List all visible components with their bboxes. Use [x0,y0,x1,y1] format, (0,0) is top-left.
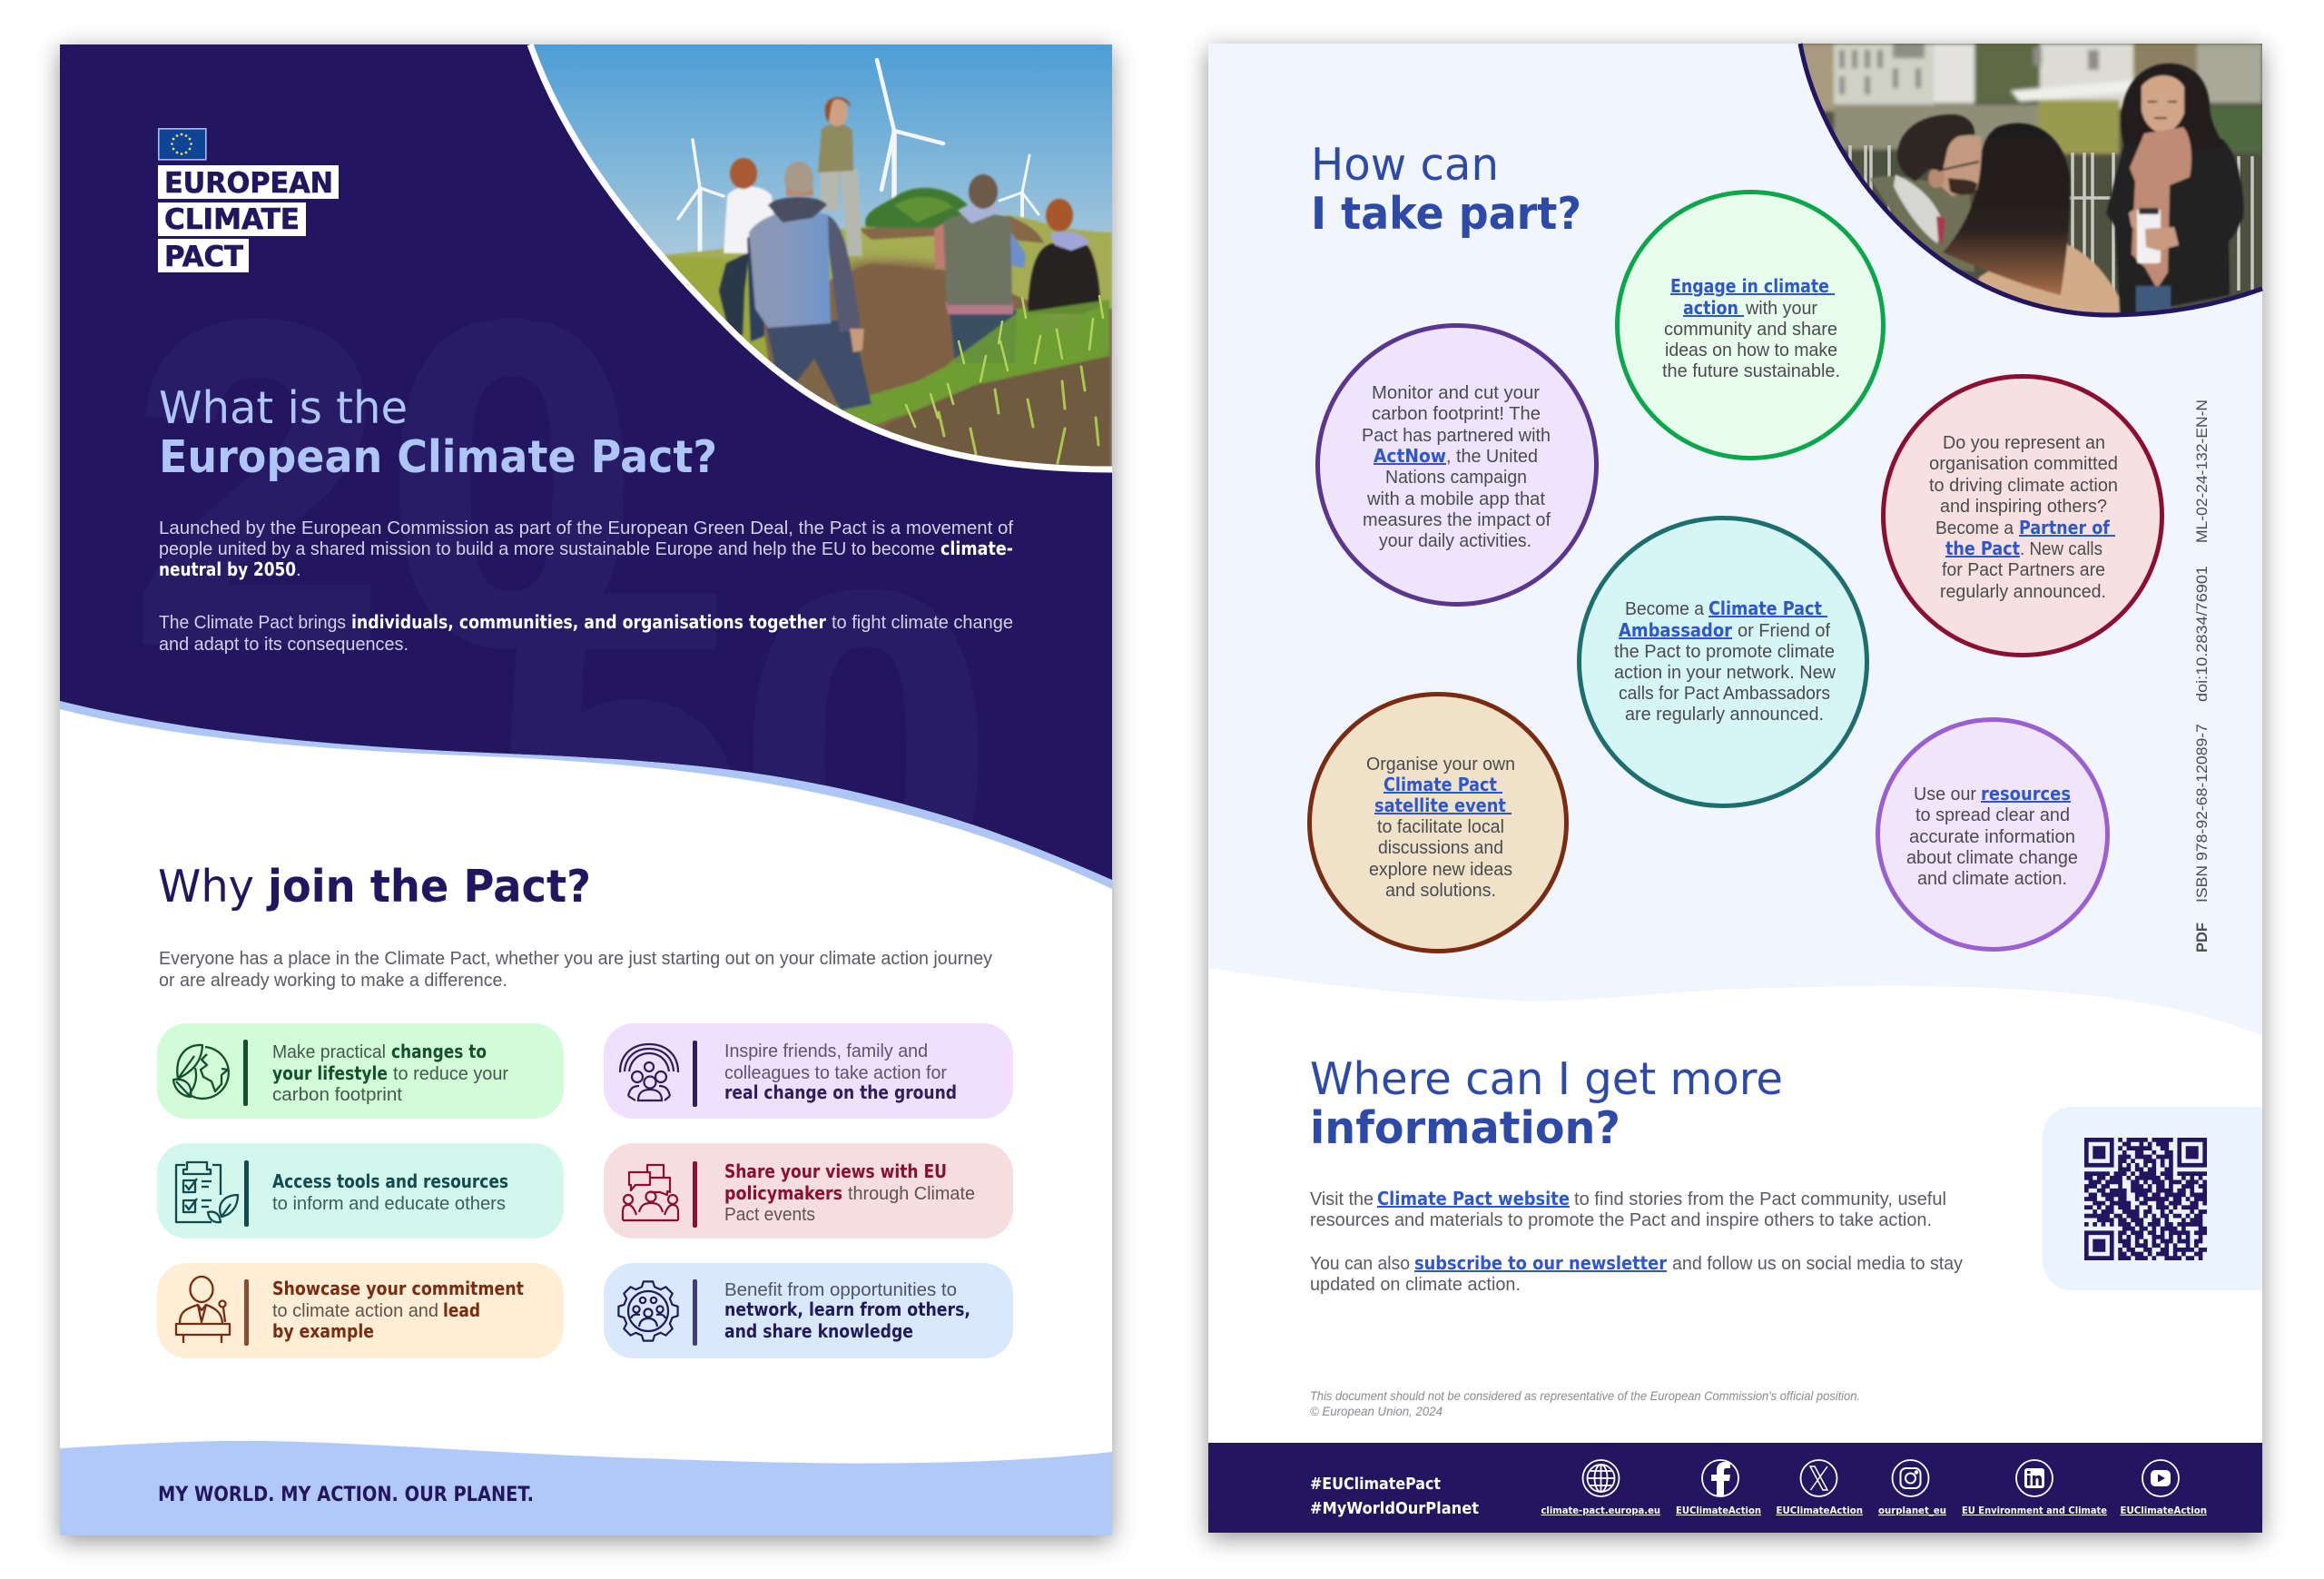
text block: intro: The Climate Pact brings [159,612,346,633]
card text: by example [272,1320,374,1342]
heading: how can I take part: How can [1311,139,1499,191]
curve border of photo [1800,44,2262,315]
pale blue background wave [1208,44,2262,1036]
circle: climate pact ambassador: calls for Pact Ambassadors [1619,683,1830,704]
circle: monitor carbon footprint: Pact has partnered with [1362,425,1551,446]
icon: facebook [1702,1460,1738,1496]
card text: through Climate [848,1183,975,1204]
circle: resources [1877,719,2108,950]
card text: carbon footprint [272,1084,402,1105]
circle: resources: and climate action. [1917,868,2067,889]
icon: checklist with leaf [176,1162,238,1222]
social link labels: EUClimateAction [2121,1505,2207,1516]
heading: why join the pact: Why [158,861,254,913]
card text: to climate action and [272,1300,438,1321]
social link labels: EU Environment and Climate [1962,1505,2107,1516]
circle: partner of the pact: organisation committed [1929,453,2118,474]
woman facing the viewer [2106,136,2243,316]
heading: what is the European Climate Pact [159,382,717,483]
circle: climate pact ambassador [1580,518,1866,806]
logo: European Climate Pact: PACT [164,241,243,273]
text block: visit website and newsletter: resources and materials to promote the Pact and inspire others to take action. [1310,1209,1932,1230]
man in blue vest [766,320,872,410]
divider bar [693,1161,697,1228]
card text: Access tools and resources [272,1170,508,1192]
circle: engage in climate action: action [1683,297,1744,319]
circle: partner of the pact: . New calls [2020,538,2102,559]
heading: how can I take part: I take part? [1311,188,1581,240]
photo: three people talking [1800,44,2262,318]
panel: page 1 what is the pact [60,44,1112,1535]
icon: linkedin [2016,1460,2053,1496]
text block: why join intro [159,948,993,991]
card text: your lifestyle [272,1062,388,1084]
card text: lead [443,1299,480,1321]
social link labels: ourplanet_eu [1878,1505,1946,1516]
circle: monitor carbon footprint: Nations campaign [1385,467,1527,488]
card: network and learn [604,1263,1013,1358]
circle: partner of the pact: Become a [1935,518,2014,538]
dark hero background [60,44,1112,880]
social link labels: EUClimateAction [1676,1505,1761,1516]
text block: why join intro: or are already working to make a difference. [159,970,507,991]
footer band with social links [1208,1443,2262,1533]
circle: satellite event [1309,694,1567,952]
light wave strip [60,701,1112,889]
footer wave with slogan [60,1441,1112,1535]
circle: climate pact ambassador: are regularly announced. [1625,704,1824,725]
heading: why join the pact: join the Pact? [266,861,591,913]
circle: monitor carbon footprint: measures the impact of [1363,509,1551,530]
card text [724,1160,975,1225]
text block: visit website and newsletter: updated on climate action. [1310,1274,1521,1295]
divider bar [243,1040,248,1106]
icon: website globe [1583,1460,1620,1496]
card text: Share your views with EU [724,1160,947,1182]
footer wave with slogan: MY WORLD. MY ACTION. OUR PLANET. [158,1484,534,1506]
circle: partner of the pact: regularly announced. [1940,581,2106,602]
card text: colleagues to take action for [724,1062,947,1083]
soil patch [850,255,946,272]
card: changes to lifestyle [157,1023,564,1119]
person in white [719,252,749,335]
text block: why join intro: Everyone has a place in the Climate Pact, whether you are just starting out on your climate action journey [159,948,993,969]
logo: European Climate Pact: EUROPEAN [164,167,333,200]
circle: climate pact ambassador: Ambassador [1619,619,1732,641]
text block: intro: to fight climate change [832,612,1013,633]
heading: where can I get more information: Where can I get more [1310,1053,1783,1105]
EU flag [159,129,206,160]
QR code [2084,1140,2207,1258]
card: tools and resources [157,1143,564,1239]
card text: Pact events [724,1204,815,1225]
circle: engage in climate action: community and share [1664,319,1837,340]
circle: engage in climate action: with your [1745,298,1817,319]
circle: resources: resources [1981,783,2071,804]
man in green vest [950,311,1017,363]
divider bar [693,1041,697,1107]
circle: monitor carbon footprint: carbon footprint! The [1372,403,1541,424]
circle: monitor carbon footprint [1318,325,1596,605]
card text [272,1170,508,1214]
vertical document identifiers: ML-02-24-132-EN-N [2193,400,2211,543]
text block: intro: . [296,559,301,580]
social link labels: EUClimateAction [1776,1505,1863,1516]
watermark 2050: 0 [740,499,992,1007]
card text: to reduce your [393,1063,508,1084]
social link labels [1541,1505,2207,1516]
icon: instagram [1892,1460,1928,1496]
card: share your views [604,1143,1013,1239]
circle: resources: about climate change [1906,847,2078,868]
circle: monitor carbon footprint: ActNow [1374,445,1446,467]
circle: partner of the pact: for Pact Partners are [1942,559,2105,580]
divider bar [244,1279,249,1346]
circle: satellite event: Climate Pact [1384,774,1502,795]
text block: intro: climate- [940,538,1013,559]
circle: climate pact ambassador: the Pact to promote climate [1614,641,1835,662]
woman from behind [1977,243,2122,312]
card text [272,1041,508,1105]
card text: Make practical [272,1041,386,1062]
disclaimer text: This document should not be considered as representative of the European Commission's official position. [1310,1389,1860,1403]
icon: youtube [2142,1460,2179,1496]
circle: monitor carbon footprint: with a mobile app that [1366,489,1545,509]
circle: satellite event: Organise your own [1366,754,1515,775]
panel: page 2 how can I take part [1208,44,2262,1533]
circle: satellite event: to facilitate local [1377,816,1504,837]
child in dark jacket [1040,314,1082,332]
text block: intro: and adapt to its consequences. [159,634,409,655]
text block: intro: people united by a shared mission to build a more sustainable Europe and help the EU to become [159,538,935,559]
text block: visit website and newsletter: You can also [1310,1253,1410,1274]
vertical document identifiers: PDF [2193,923,2211,952]
card text: changes to [391,1041,487,1062]
circle: climate pact ambassador: action in your network. New [1614,662,1836,683]
circle: satellite event: discussions and [1378,837,1503,858]
heading: where can I get more information: information? [1310,1102,1620,1154]
hashtags: #EUClimatePact [1310,1475,1441,1494]
circle: satellite event: satellite event [1374,794,1512,816]
QR code panel [2043,1107,2262,1290]
circle: monitor carbon footprint: , the United [1446,446,1538,467]
circle: resources: Use our [1914,784,1976,804]
circle: satellite event: explore new ideas [1369,859,1512,880]
card text: to inform and educate others [272,1193,506,1214]
card text [272,1278,524,1342]
vertical document identifiers [2193,400,2211,952]
circle: climate pact ambassador: or Friend of [1738,620,1830,641]
circle: partner of the pact: Partner of [2019,517,2115,538]
card text: policymakers [724,1182,842,1204]
circle: partner of the pact: the Pact [1945,538,2020,559]
text block: intro: individuals, communities, and organisations together [351,611,826,633]
watermark 2050: 0 [386,229,638,736]
circle: partner of the pact: and inspiring others? [1940,496,2107,517]
man with glasses [1870,176,1974,272]
circle: resources: accurate information [1909,826,2075,847]
curve border of hero photo [530,44,1112,469]
photo: people in a field with wind turbines [530,44,1112,472]
card text: Benefit from opportunities to [724,1279,957,1300]
circle: climate pact ambassador: Become a [1625,598,1705,619]
logo: European Climate Pact [158,165,339,273]
card text: Inspire friends, family and [724,1041,928,1061]
woman standing [820,169,862,256]
text block: intro [159,518,1013,655]
vertical document identifiers: doi:10.2834/76901 [2193,566,2211,702]
heading: how can I take part [1311,139,1581,240]
circle: engage in climate action: Engage in climate [1670,275,1835,297]
heading: where can I get more information [1310,1053,1783,1154]
vertical document identifiers: ISBN 978-92-68-12089-7 [2193,724,2211,903]
circle: engage in climate action: the future sustainable. [1662,360,1840,381]
disclaimer text [1310,1389,1860,1418]
circle: monitor carbon footprint: Monitor and cut your [1372,382,1540,403]
divider bar [244,1160,249,1227]
icon: globe with leaves [173,1045,229,1099]
circle: climate pact ambassador: Climate Pact [1709,597,1827,619]
icon: gear with people [618,1281,678,1341]
heading: what is the European Climate Pact: European Climate Pact? [159,431,717,483]
heading: what is the European Climate Pact: What is the [159,382,408,434]
text block: visit website and newsletter: and follow us on social media to stay [1672,1253,1964,1274]
divider bar [693,1279,697,1346]
card text: Showcase your commitment [272,1278,524,1299]
circle: partner of the pact [1883,376,2162,656]
circle: resources: to spread clear and [1915,804,2070,825]
watermark 2050: 2 [132,229,384,736]
logo: European Climate Pact: CLIMATE [164,203,300,236]
hashtags [1310,1475,1479,1518]
watermark 2050 [510,754,971,824]
circle: partner of the pact: to driving climate action [1929,475,2118,496]
card text [724,1279,970,1342]
icon: rainbow over people [620,1044,678,1100]
card: showcase commitment [157,1263,564,1358]
circle: partner of the pact: Do you represent an [1943,432,2105,453]
social link labels: climate-pact.europa.eu [1541,1505,1660,1516]
circle: engage in climate action: ideas on how to make [1665,340,1837,360]
text block: visit website and newsletter: to find stories from the Pact community, useful [1574,1189,1946,1209]
circle: monitor carbon footprint: your daily activities. [1379,530,1531,551]
text block: intro: Launched by the European Commission as part of the European Green Deal, the Pact is a movement of [159,518,1013,538]
circle: engage in climate action [1618,192,1883,458]
text block: visit website and newsletter [1310,1188,1964,1295]
card text: and share knowledge [724,1320,913,1342]
icon: people with speech bubbles [623,1165,678,1220]
card text [724,1041,957,1103]
text block: visit website and newsletter: Visit the [1310,1189,1374,1209]
circle: satellite event: and solutions. [1385,880,1496,901]
card text: real change on the ground [724,1081,957,1103]
disclaimer text: © European Union, 2024 [1310,1405,1443,1418]
text block: visit website and newsletter: subscribe to our newsletter [1414,1252,1667,1274]
icon: speaker at lectern [176,1277,230,1343]
card text: network, learn from others, [724,1298,970,1320]
card: inspire friends [604,1023,1013,1119]
hashtags: #MyWorldOurPlanet [1310,1499,1479,1518]
icon: X [1801,1460,1837,1496]
text block: intro: neutral by 2050 [159,558,296,580]
text block: visit website and newsletter: Climate Pact website [1377,1188,1570,1209]
watermark 2050: 5 [490,499,743,1007]
